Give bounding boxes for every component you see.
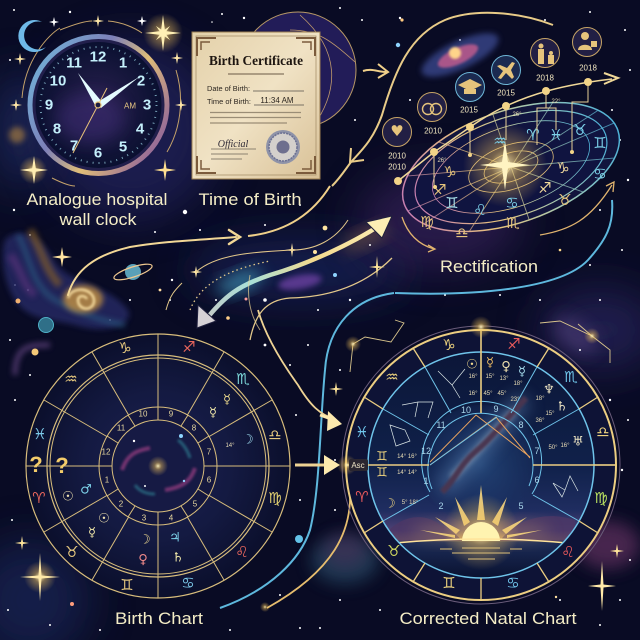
corrected chart zodiac signs: ♎: [596, 423, 610, 441]
corrected chart zodiac signs: [355, 335, 610, 592]
certificate corner ornaments: [197, 38, 315, 173]
corrected chart axes: [368, 330, 616, 465]
birth chart house numbers: 1: [105, 476, 110, 484]
birth chart house numbers: 7: [207, 448, 212, 456]
birth chart zodiac signs: ♒: [64, 370, 78, 388]
clock hands: [73, 73, 139, 153]
birth chart house numbers: 11: [117, 424, 126, 432]
wheel sunburst: [463, 123, 547, 207]
wheel zodiac glyphs: ♑: [443, 163, 457, 181]
corrected chart zodiac signs: ♓: [355, 423, 369, 441]
corrected chart planets and degrees: 16°: [468, 391, 478, 397]
birth chart planets: ♂: [80, 482, 92, 498]
arrow: curve toward rectification: [248, 186, 330, 236]
label: rectification: Rectification: [440, 257, 538, 276]
arrow: birth chart to corrected chart: [295, 455, 340, 475]
timeline year labels: 2018: [579, 64, 597, 72]
unknown time question marks: ?: [29, 452, 43, 477]
corrected chart zodiac signs: ♑: [442, 336, 456, 354]
timeline year labels: 2010: [388, 152, 406, 160]
label: birth chart: Birth Chart: [115, 609, 203, 628]
official seal: [266, 130, 300, 164]
label: clock: [26, 190, 168, 229]
corrected chart outer spokes: [346, 348, 616, 600]
timeline year labels: 26°: [512, 112, 522, 118]
certificate fields: Date of Birth:: [207, 86, 250, 93]
birth chart planets: ♄: [172, 550, 184, 566]
birth chart zodiac signs: ♌: [235, 543, 249, 561]
wheel zodiac glyphs: ♍: [420, 213, 434, 231]
decorative sparkles top left: [9, 13, 299, 278]
birth chart spokes in house ring: [99, 407, 217, 525]
icon: career person: [572, 28, 602, 56]
Asc marker: Asc: [351, 461, 365, 470]
corrected chart planets and degrees: 50°: [548, 445, 558, 451]
timeline nodes: [394, 78, 592, 189]
wheel zodiac glyphs: ♊: [445, 194, 459, 212]
corrected chart zodiac signs: ♐: [507, 335, 521, 353]
wheel zodiac glyphs: ♉: [558, 191, 572, 209]
clock numerals: 12: [90, 48, 106, 66]
constellations above chart: [345, 316, 610, 372]
timeline year labels: 2010: [388, 162, 406, 172]
panel: birth chart wheel: [26, 334, 290, 598]
timeline year labels: 26°: [437, 158, 447, 164]
birth chart planets: 14°: [225, 443, 235, 449]
decorative galaxy swirl lower left: [3, 230, 129, 375]
birth chart zodiac signs: ♍: [268, 489, 282, 507]
certificate title: Birth Certificate: [209, 54, 303, 69]
wheel zodiac glyphs: ♈: [526, 126, 540, 144]
wheel zodiac glyphs: ♐: [538, 179, 552, 197]
wheel zodiac glyphs: ♒: [493, 132, 507, 150]
icon: parent and child: [530, 38, 560, 68]
icon: graduation cap: [456, 72, 484, 102]
corrected chart planets and degrees: ☿: [518, 364, 526, 380]
wheel zodiac glyphs: ♎: [455, 224, 469, 242]
corrected chart planets and degrees: 45°: [483, 391, 493, 397]
corrected chart planets and degrees: 23°: [510, 397, 520, 403]
decorative galaxy top right: [416, 25, 504, 85]
birth chart planets: ♀: [138, 552, 148, 568]
clock numerals: [45, 48, 151, 162]
corrected chart planets and degrees: ♅: [572, 434, 584, 450]
birth chart planets: ☉: [62, 490, 74, 504]
decorative sparkles lower right: [329, 256, 624, 611]
corrected chart house numbers: 5: [518, 501, 524, 511]
corrected chart planets and degrees: ♀: [501, 360, 511, 374]
clock numerals: 11: [66, 54, 82, 72]
birth chart zodiac signs: ♉: [65, 543, 79, 561]
timeline year labels: 2010: [424, 126, 442, 136]
birth chart house numbers: 10: [139, 410, 148, 418]
label: clock: Analogue hospital: [26, 190, 168, 209]
birth chart house numbers: 6: [207, 476, 212, 484]
birth chart planets: ☽: [242, 432, 254, 448]
arrow: small arrow from globe: [363, 64, 388, 78]
official signature: [211, 139, 256, 159]
Milky Way band: [442, 398, 526, 492]
clock numerals: 5: [119, 138, 127, 156]
corrected chart zodiac signs: ♏: [564, 368, 578, 386]
corrected chart house numbers: 12: [421, 446, 431, 456]
arrow: two-way stream between birth chart and rectification: [197, 216, 392, 328]
corrected chart planets and degrees: ♊: [376, 466, 388, 480]
corrected chart planets and degrees: 14° 16°: [397, 454, 418, 460]
certificate fields: Time of Birth:: [207, 99, 251, 106]
birth chart house numbers: 2: [119, 500, 124, 508]
corrected chart zodiac signs: ♍: [594, 489, 608, 507]
corrected chart planets and degrees: 15°: [545, 411, 555, 417]
corrected chart planets and degrees: 18°: [535, 396, 545, 402]
corrected chart zodiac signs: ♉: [387, 542, 401, 560]
corrected chart planets and degrees: ♄: [556, 400, 568, 414]
clouds on horizon: [385, 516, 575, 541]
birth chart planets: ☿: [223, 392, 231, 408]
birth chart zodiac signs: [32, 338, 282, 594]
constellations inside chart: [390, 369, 578, 497]
birth chart house numbers: 4: [169, 514, 174, 522]
corrected chart planets and degrees: 5° 18°: [402, 500, 419, 506]
icon: orbit arcs around clock: [22, 21, 181, 186]
icon: crescent moon: [18, 20, 46, 52]
wheel zodiac glyphs: ♏: [506, 214, 520, 232]
corrected chart house numbers: 11: [436, 420, 446, 430]
arrow: galaxy to certificate stream: [68, 230, 240, 295]
panel: rectification wheel: [386, 77, 636, 257]
icon: wedding rings: [418, 92, 446, 122]
icon: couple: ♥: [390, 122, 404, 140]
wheel zodiac glyphs: ♉: [573, 121, 587, 139]
timeline year labels: [388, 64, 597, 172]
birth chart house numbers: 8: [192, 424, 197, 432]
wheel zodiac glyphs: ♋: [505, 194, 519, 212]
timeline year labels: 22°: [551, 99, 561, 105]
timeline connectors: [434, 82, 588, 187]
certificate fields: [207, 86, 304, 123]
birth chart zodiac signs: ♈: [32, 489, 46, 507]
label: time of birth: Time of Birth: [198, 190, 302, 209]
unknown time question marks: ?: [55, 453, 69, 478]
icon: ringed planet: [112, 261, 154, 283]
corrected chart planets and degrees: 13°: [499, 376, 509, 382]
corrected chart planets and degrees: ☿: [486, 356, 494, 370]
corrected chart planets and degrees: 14° 14°: [397, 470, 418, 476]
corrected chart zodiac signs: ♋: [506, 574, 520, 592]
clock numerals: 9: [45, 96, 53, 114]
corrected chart planets and degrees: 36°: [535, 418, 545, 424]
decorative thin stream curves: [166, 220, 392, 340]
clock numerals: 10: [50, 72, 66, 90]
arrow: upper arrow into natal chart: [320, 411, 342, 431]
clock numerals: 2: [137, 72, 145, 90]
corrected chart planets and degrees: 16°: [560, 443, 570, 449]
timeline year labels: 2015: [460, 106, 478, 114]
corrected chart house numbers: 6: [534, 475, 540, 485]
birth chart planets: ☿: [209, 406, 217, 420]
corrected chart house numbers: 9: [493, 404, 499, 414]
clock numerals: 7: [70, 138, 78, 154]
sun rays: [420, 485, 542, 538]
wheel zodiac glyphs: ♋: [593, 165, 607, 183]
corrected chart sky, horizon, sun: [368, 382, 594, 570]
panel: birth certificate: [192, 32, 320, 179]
birth chart zodiac signs: ♓: [33, 425, 47, 443]
AM label: AM: [124, 102, 136, 110]
wheel zodiac glyphs: [420, 121, 607, 242]
birth chart zodiac signs: ♐: [182, 338, 196, 356]
birth chart house numbers: 5: [193, 500, 198, 508]
birth chart house numbers: 12: [102, 448, 111, 456]
clock numerals: 4: [136, 120, 145, 138]
corrected chart planets and degrees: 15°: [485, 374, 495, 380]
decorative sparkles lower left: [15, 536, 270, 612]
corrected chart zodiac signs: ♈: [355, 488, 369, 506]
corrected chart house numbers: 1: [423, 476, 429, 486]
panel: corrected natal chart wheel: [342, 326, 620, 604]
corrected chart planets and degrees: ♆: [543, 382, 555, 398]
arrow: gold curve to corrected chart: [248, 275, 335, 419]
birth chart central galaxy: [112, 420, 204, 512]
birth chart zodiac signs: ♋: [181, 574, 195, 592]
icon: couple: [382, 118, 412, 146]
birth chart planets: ☉: [98, 512, 110, 526]
birth chart zodiac signs: ♏: [236, 370, 250, 388]
unknown time question marks: [29, 452, 69, 478]
corrected chart zodiac signs: ♌: [561, 543, 575, 561]
corrected chart zodiac signs: ♊: [442, 574, 456, 592]
corrected chart planets and degrees: 16°: [468, 374, 478, 380]
panel: hospital wall clock: [22, 21, 181, 186]
birth chart zodiac signs: ♎: [268, 426, 282, 444]
label: corrected natal chart: Corrected Natal Chart: [400, 609, 577, 628]
arrow: long curve from timeline to certificate: [332, 13, 553, 186]
corrected chart planets and degrees: 18°: [513, 381, 523, 387]
timeline year labels: 2015: [497, 88, 515, 98]
birth chart house numbers: 3: [142, 514, 147, 522]
Asc marker: [337, 455, 368, 475]
corrected chart house numbers: 7: [534, 446, 540, 456]
birth chart zodiac signs: ♊: [120, 576, 134, 594]
arrow: gold sweep at bottom: [267, 490, 350, 608]
birth chart planets: ♃: [169, 530, 181, 546]
corrected chart planets and degrees: 45°: [497, 391, 507, 397]
corrected chart planets and degrees: ☽: [384, 496, 396, 512]
arrow: curved arrows under wheel: [402, 182, 614, 252]
icon: airplane: [492, 56, 520, 84]
corrected chart house numbers: 10: [461, 405, 471, 415]
wheel zodiac glyphs: ♊: [593, 134, 607, 152]
corrected chart house numbers: 2: [438, 501, 444, 511]
arrow: blue curve to corrected chart: [220, 200, 612, 608]
clock numerals: 8: [53, 120, 61, 138]
corrected chart planets and degrees: ♊: [376, 450, 388, 464]
birth chart zodiac signs: ♑: [118, 339, 132, 357]
official signature: Official: [218, 139, 248, 150]
planet globe behind certificate: [240, 12, 356, 128]
timeline year labels: 2018: [536, 74, 554, 82]
clock numerals: 1: [119, 54, 127, 72]
wheel zodiac glyphs: ♑: [556, 159, 570, 177]
corrected chart zodiac signs: ♒: [385, 368, 399, 386]
birth chart planets: ☿: [88, 526, 96, 540]
corrected chart house numbers: [421, 404, 540, 511]
wheel zodiac glyphs: ♓: [549, 126, 563, 144]
corrected chart planets and degrees: ☉: [466, 358, 478, 372]
aspect lines: [430, 415, 530, 465]
birth chart house numbers: [102, 410, 212, 522]
clock numerals: 3: [143, 96, 151, 114]
wheel zodiac glyphs: ♐: [433, 181, 447, 199]
label: clock: wall clock: [58, 210, 137, 229]
corrected chart planets and degrees: [376, 356, 584, 512]
wheel zodiac glyphs: ♌: [473, 201, 487, 219]
corrected chart inner spokes: [383, 367, 579, 521]
certificate fields: 11:34 AM: [260, 96, 294, 105]
birth chart planets: ☽: [139, 532, 151, 548]
birth chart planets: [62, 392, 254, 568]
clock numerals: 6: [94, 144, 102, 162]
birth chart house numbers: 9: [169, 410, 174, 418]
birth chart spokes: [26, 334, 290, 598]
chart: life-event timeline: [382, 28, 618, 189]
corrected chart house numbers: 8: [518, 420, 524, 430]
